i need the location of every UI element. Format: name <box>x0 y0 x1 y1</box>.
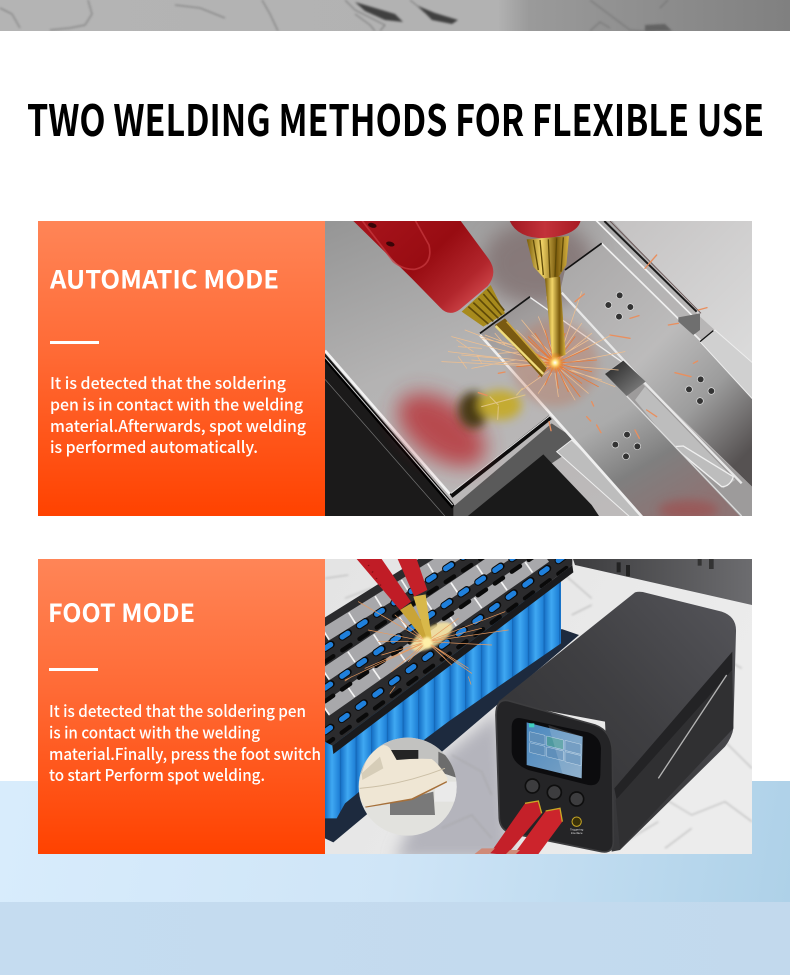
description: foot mode: is in contact with the welding <box>49 720 260 744</box>
panel: foot mode text <box>38 559 325 854</box>
background band: pale blue lower section <box>0 781 790 902</box>
machine front face <box>496 700 613 852</box>
red reflection on plate <box>384 378 499 482</box>
description: foot mode <box>49 698 321 786</box>
description: automatic mode: pen is in contact with the welding <box>50 392 303 416</box>
drilled hole groups <box>605 292 715 460</box>
screen bezel <box>512 718 601 785</box>
metal plate base <box>325 220 755 520</box>
background wall <box>573 559 752 605</box>
welding sparks <box>345 602 508 693</box>
description: foot mode: to start Perform spot welding. <box>49 762 265 786</box>
weld flash <box>545 353 565 373</box>
description: automatic mode <box>50 370 306 458</box>
marble header strip <box>0 0 790 31</box>
control buttons <box>525 779 584 806</box>
battery cells <box>325 575 561 818</box>
tray base plate <box>325 629 579 842</box>
left welding pen <box>352 220 547 377</box>
right welding pen <box>509 220 581 359</box>
image: welding pens on metal strips with sparks <box>325 221 752 516</box>
trigger port: Triggering <box>570 828 584 832</box>
foot pedal inset circle <box>358 737 458 836</box>
metal strips <box>480 243 755 520</box>
red connector cables <box>473 801 562 855</box>
image: battery pack and spot welder machine <box>325 559 752 854</box>
marble table <box>325 555 755 860</box>
description: automatic mode: material.Afterwards, spot welding <box>50 413 306 437</box>
battery tray <box>325 552 585 754</box>
rail at upper right <box>596 220 701 335</box>
spot welder machine <box>496 592 736 852</box>
gold reflection on plate <box>458 390 522 428</box>
trigger port <box>570 817 584 835</box>
touch screen display <box>527 722 583 778</box>
shaded plate behind the pens <box>482 220 595 307</box>
description: automatic mode: is performed automatically. <box>50 434 258 458</box>
description: foot mode: It is detected that the soldering pen <box>49 698 306 722</box>
heading: foot mode: FOOT MODE <box>48 594 195 630</box>
panel: automatic mode text <box>38 221 325 516</box>
heading: automatic mode: AUTOMATIC MODE <box>49 260 279 296</box>
trigger port: Interface <box>571 831 583 835</box>
description: automatic mode: It is detected that the soldering <box>50 370 286 394</box>
spark burst <box>442 255 707 438</box>
red welding pens <box>357 559 432 648</box>
background band: blue footer <box>0 902 790 975</box>
